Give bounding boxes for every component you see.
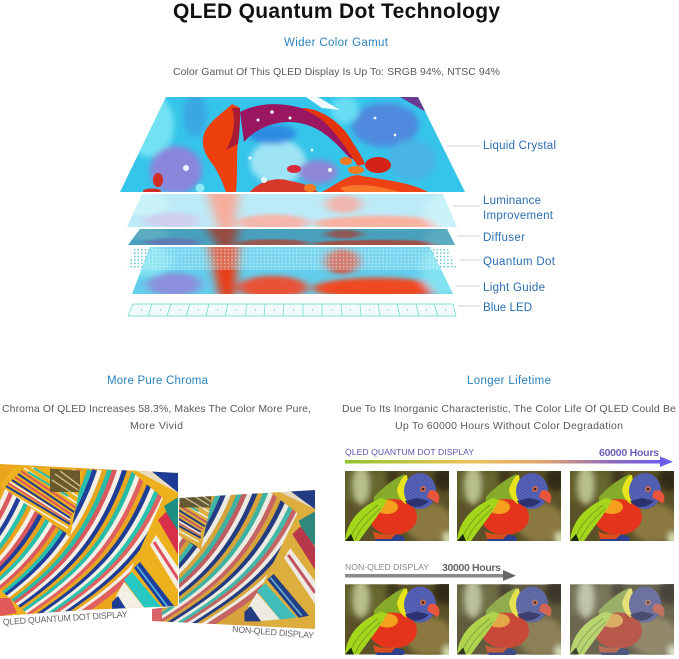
label: non-QLED display: NON-QLED DISPLAY: [232, 624, 314, 640]
image: non-QLED scarf: [152, 490, 315, 629]
text: color gamut description: Color Gamut Of This QLED Display Is Up To: SRGB 94%, NTSC 94%: [173, 66, 500, 78]
photo: non-QLED bird 2: [457, 578, 569, 659]
layer: diffuser: [128, 229, 455, 245]
photo: QLED bird 1: [345, 465, 457, 546]
text: lifetime description: Up To 60000 Hours Without Color Degradation: [395, 420, 623, 432]
label: liquid crystal: Liquid Crystal: [483, 140, 556, 152]
label: quantum dot: Quantum Dot: [483, 256, 556, 268]
label: luminance improvement: Improvement: [483, 210, 554, 222]
layer labels: [483, 140, 556, 314]
label: blue LED: Blue LED: [483, 302, 532, 314]
text: chroma description: Chroma Of QLED Increases 58.3%, Makes The Color More Pure,: [2, 403, 311, 415]
label: 60000 hours: 60000 Hours: [599, 447, 659, 459]
panel: more pure chroma: [0, 375, 331, 648]
panel: longer lifetime: [342, 375, 679, 659]
layer: liquid crystal: [120, 97, 465, 192]
label: QLED quantum dot display: QLED QUANTUM DOT DISPLAY: [345, 447, 474, 457]
heading: more pure chroma: More Pure Chroma: [107, 375, 209, 387]
diagram: exploded display layers: [110, 90, 480, 316]
photo: QLED bird 3: [570, 465, 679, 546]
label: diffuser: Diffuser: [483, 232, 525, 244]
label: QLED quantum dot display: QLED QUANTUM DOT DISPLAY: [2, 609, 128, 627]
heading: longer lifetime: Longer Lifetime: [467, 375, 551, 387]
layer: light guide: [132, 247, 453, 294]
layer: blue LED: [128, 304, 456, 316]
layer: luminance improvement: [127, 194, 457, 227]
arrow: QLED lifetime: [345, 456, 673, 467]
photo: non-QLED bird 1: [345, 578, 457, 659]
layer: quantum dot: [127, 247, 457, 269]
image: QLED scarf: [0, 464, 178, 616]
label: luminance improvement: Luminance: [483, 195, 541, 207]
label: light guide: Light Guide: [483, 282, 545, 294]
title: QLED Quantum Dot Technology: [173, 0, 500, 23]
leader lines: [447, 146, 480, 306]
photo: non-QLED bird 3: [570, 578, 679, 659]
text: lifetime description: Due To Its Inorganic Characteristic, The Color Life Of QLED Could Be: [342, 403, 676, 415]
photo: QLED bird 2: [457, 465, 569, 546]
label: 30000 hours: 30000 Hours: [442, 562, 501, 574]
label: non-QLED display: NON-QLED DISPLAY: [345, 562, 429, 572]
arrow: non-QLED lifetime: [345, 570, 516, 581]
heading: wider color gamut: Wider Color Gamut: [284, 37, 389, 49]
text: chroma description: More Vivid: [130, 420, 183, 432]
